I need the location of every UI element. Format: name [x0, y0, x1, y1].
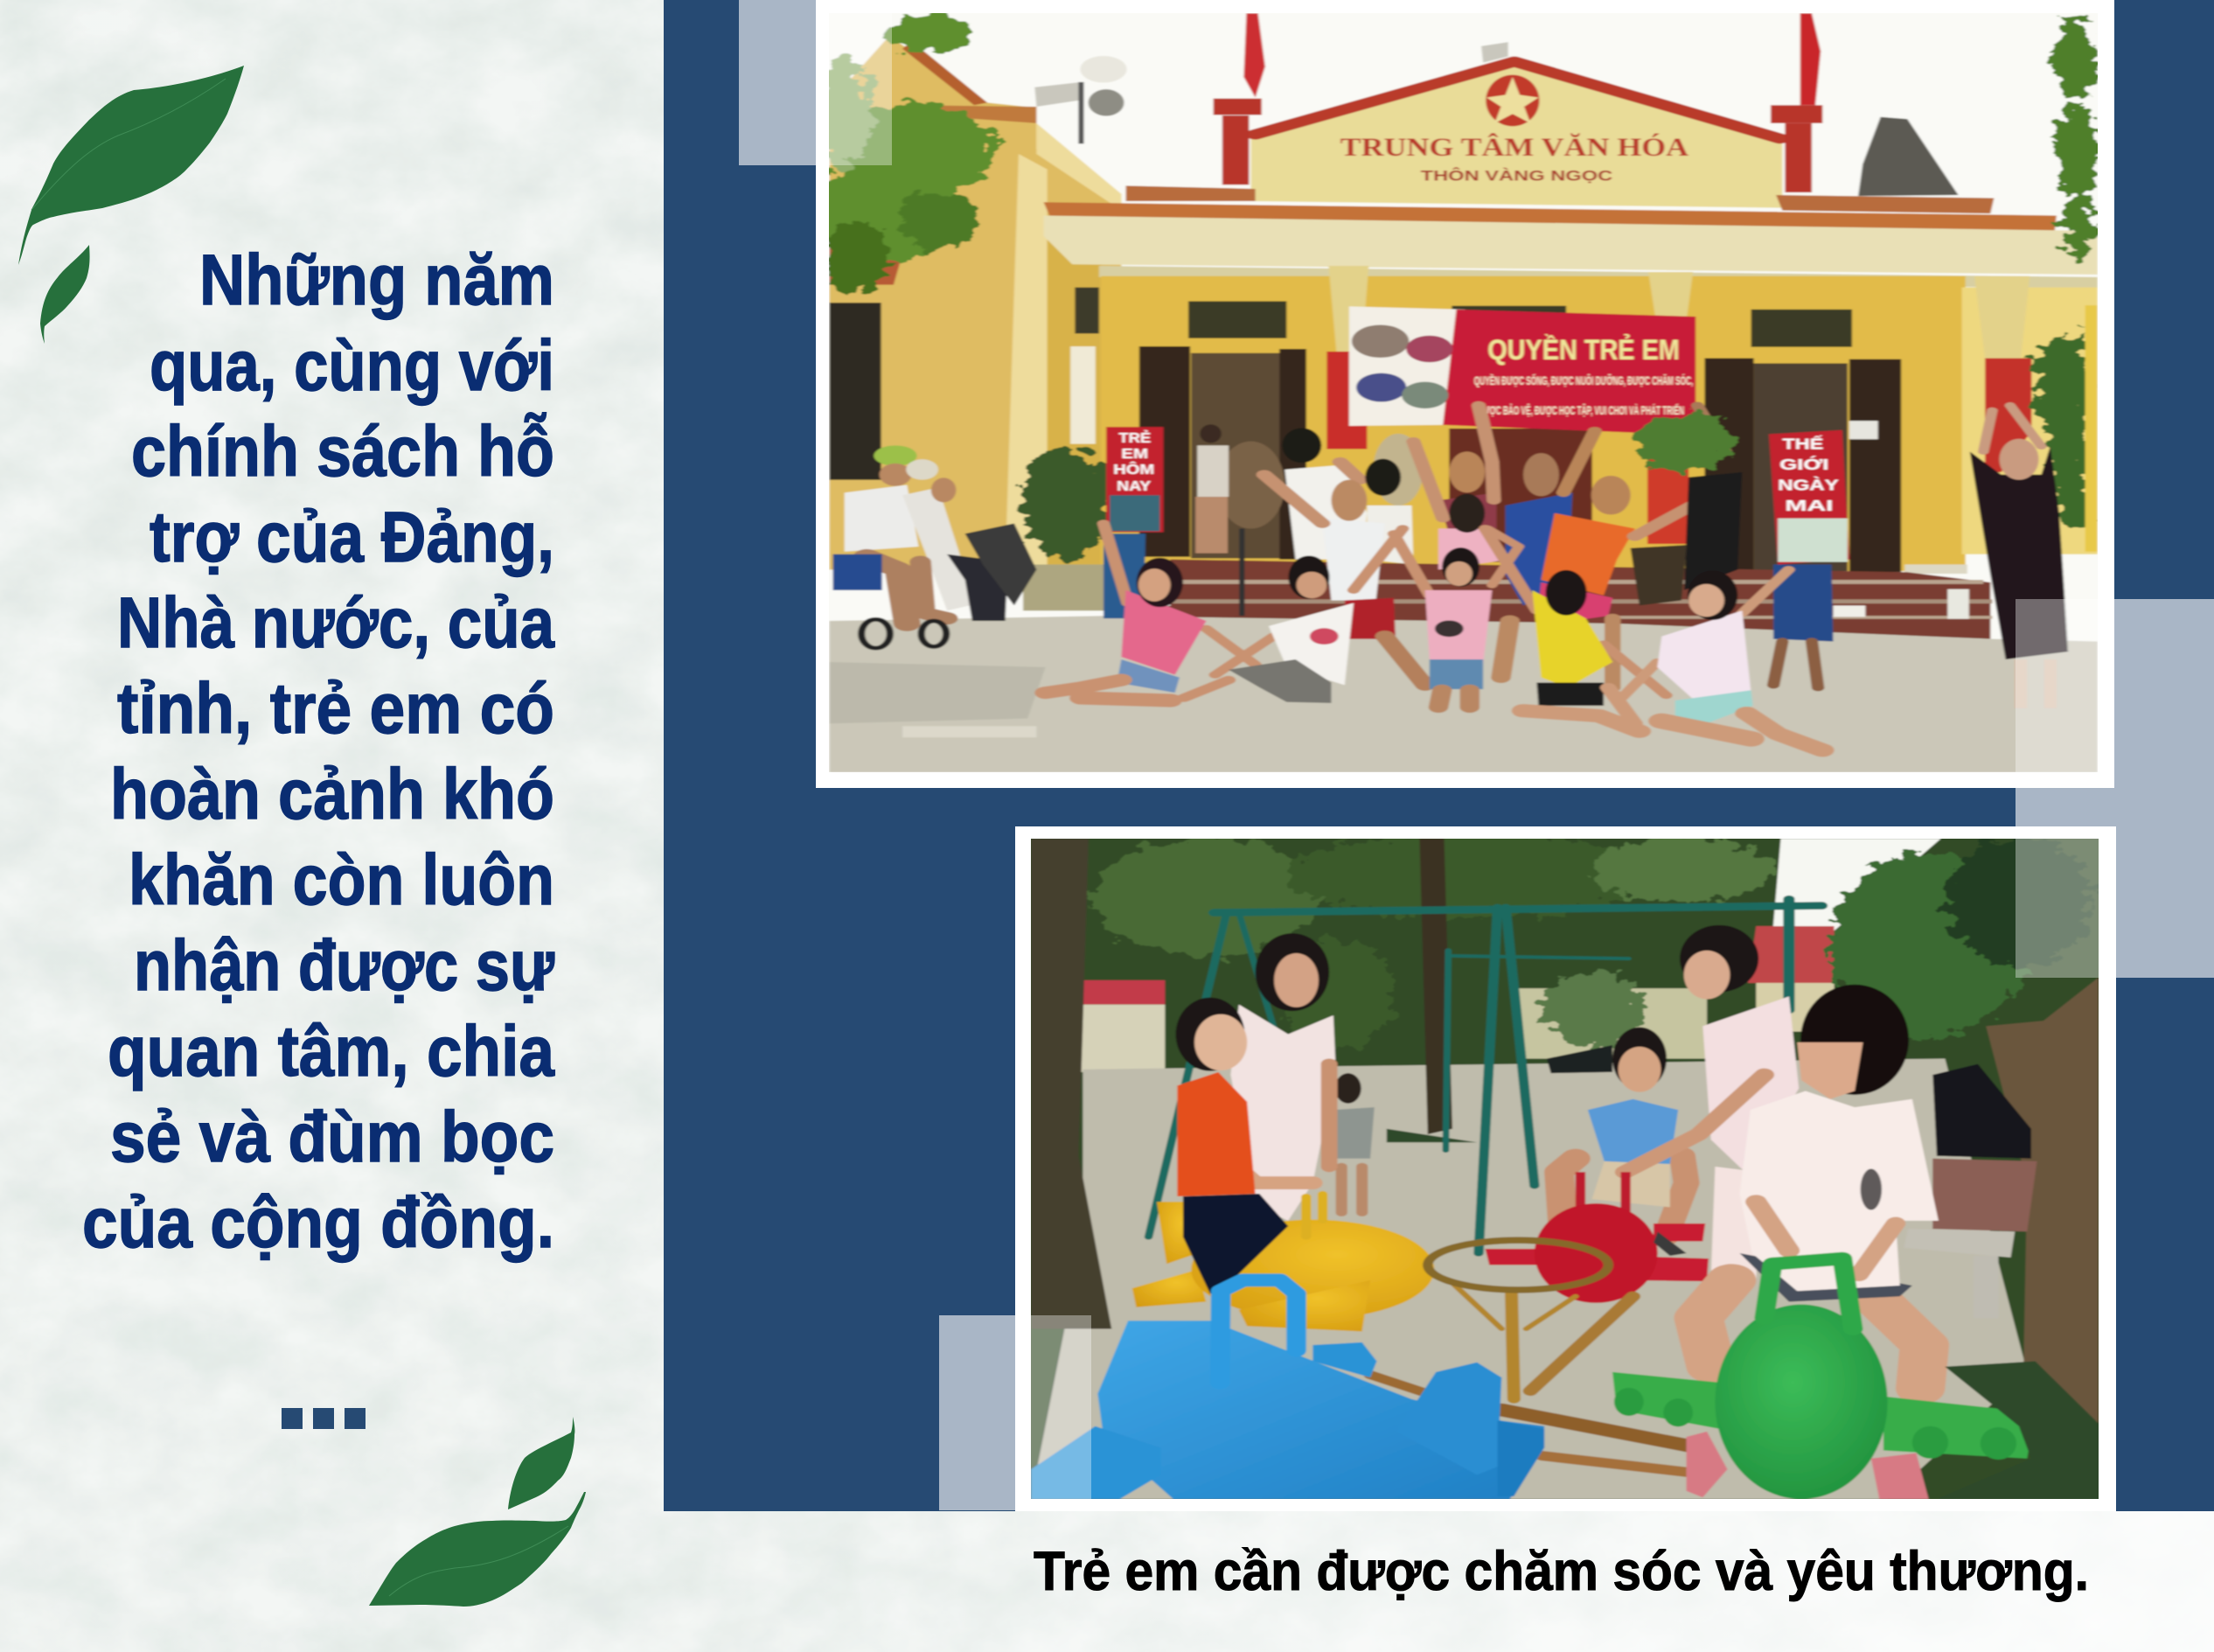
red plane	[1486, 1172, 1709, 1303]
icon: small leaf bottom	[508, 1417, 574, 1509]
gable: TRUNG TÂM VĂN HÓA	[1340, 133, 1688, 162]
panel: navy backdrop	[664, 0, 2214, 1511]
car	[1932, 1064, 2031, 1159]
icon: big leaf bottom	[369, 1492, 586, 1607]
caption: Trẻ em cần được chăm sóc và yêu thương.	[1034, 1541, 2089, 1602]
icon: three squares	[282, 1408, 366, 1429]
child: white shirt boy	[1184, 528, 1403, 703]
green plane	[1612, 1258, 2031, 1499]
left sign: EM	[1121, 446, 1148, 462]
left sign: HÔM	[1113, 462, 1154, 477]
swing frame	[1149, 899, 1822, 1253]
left sign: TRẺ	[1118, 430, 1151, 445]
decorative square: bottom left	[939, 1315, 1091, 1510]
steering ring	[1370, 1240, 1699, 1472]
right sign child: GIỚI	[1779, 455, 1828, 473]
photo: carers and children at the playground	[1026, 832, 2109, 1507]
fans	[1217, 442, 1285, 528]
girl with white shirt	[1699, 985, 1939, 1388]
body text: khăn còn luôn	[129, 840, 554, 920]
steps	[1090, 560, 1992, 639]
small items on the steps	[1947, 589, 1969, 619]
tree left	[809, 13, 996, 292]
gable: THÔN VÀNG NGỌC	[1421, 167, 1612, 184]
flags	[1243, 13, 1265, 97]
right sign child: THẾ	[1782, 435, 1823, 453]
artificial grass	[1937, 1362, 2099, 1499]
photo: children dancing in front of the cultural centre	[809, 0, 2117, 785]
ground	[1031, 1058, 2027, 1499]
child: yellow shirt	[1485, 528, 1667, 731]
body text: nhận được sự	[134, 926, 555, 1006]
right sign child	[1769, 430, 1849, 687]
photo frame: top	[816, 0, 2114, 788]
decorative square: right	[2016, 599, 2214, 978]
child on swing	[1333, 1073, 1375, 1213]
bush	[1021, 447, 1110, 560]
icon: leaf top	[18, 66, 244, 265]
photo: children dancing in front of the cultural centre: ĐƯỢC BẢO VỆ, ĐƯỢC HỌC TẬP, VUI CHƠI VÀ PHÁT TRIỂN	[1479, 403, 1684, 418]
child: pink shirt centre	[1394, 528, 1519, 708]
neighbouring roof	[1858, 117, 1959, 196]
body text: sẻ và đùm bọc	[110, 1098, 554, 1177]
body text: qua, cùng với	[150, 326, 554, 406]
woman left	[1230, 933, 1336, 1221]
icon: small leaf top	[40, 245, 90, 344]
body text: quan tâm, chia	[108, 1012, 555, 1091]
banner	[1349, 306, 1695, 436]
sky and background	[1772, 839, 1941, 934]
photo: children dancing in front of the cultural centre: QUYỀN ĐƯỢC SỐNG, ĐƯỢC NUÔI DƯỠNG, ĐƯỢC CHĂM SÓC,	[1474, 373, 1693, 388]
body text: của cộng đồng.	[82, 1183, 554, 1263]
left sign	[1104, 427, 1163, 618]
decorative square: top left	[739, 0, 892, 165]
boy in blue	[1559, 1028, 1687, 1237]
child: patterned shirt	[1621, 569, 1822, 750]
blue plane	[1031, 1280, 1544, 1499]
left building	[829, 36, 1121, 569]
bench	[1904, 1159, 2037, 1318]
tree right	[2030, 16, 2100, 528]
gable	[1214, 61, 1822, 208]
body text	[82, 240, 555, 1263]
body text: trợ của Đảng,	[150, 498, 554, 577]
body text: Nhà nước, của	[117, 583, 555, 663]
ground	[829, 616, 2098, 772]
windows	[1188, 301, 1852, 347]
doors	[1139, 346, 1967, 574]
columns	[1328, 266, 2030, 359]
child: pink shirt	[1046, 524, 1256, 701]
trunks	[1031, 839, 2099, 1424]
standing children	[1264, 406, 1742, 687]
body text: chính sách hỗ	[131, 412, 554, 491]
standing person behind	[1195, 424, 1229, 554]
centre pot	[1631, 545, 1687, 605]
body text: hoàn cảnh khó	[110, 755, 554, 834]
body text: tỉnh, trẻ em có	[117, 669, 554, 749]
foliage	[1091, 832, 2092, 1048]
vertical flags	[1326, 352, 1367, 449]
left sign: NAY	[1117, 478, 1152, 494]
yellow plane	[1132, 1191, 1434, 1332]
loudspeakers	[1034, 42, 1508, 143]
woman right	[1625, 925, 1799, 1280]
elderly spectators	[832, 445, 1036, 648]
right sign child: NGÀY	[1778, 476, 1839, 494]
yellow wall	[1101, 276, 1966, 571]
photo overlays: translucent squares	[829, 13, 2099, 1499]
photo frame: bottom	[1015, 826, 2116, 1511]
banner: QUYỀN TRẺ EM	[1487, 333, 1680, 366]
child in orange	[1176, 998, 1312, 1293]
body text: Những năm	[199, 240, 554, 320]
cornice	[1044, 185, 2098, 289]
woman in black	[1970, 406, 2068, 708]
right sign child: MAI	[1785, 497, 1834, 514]
